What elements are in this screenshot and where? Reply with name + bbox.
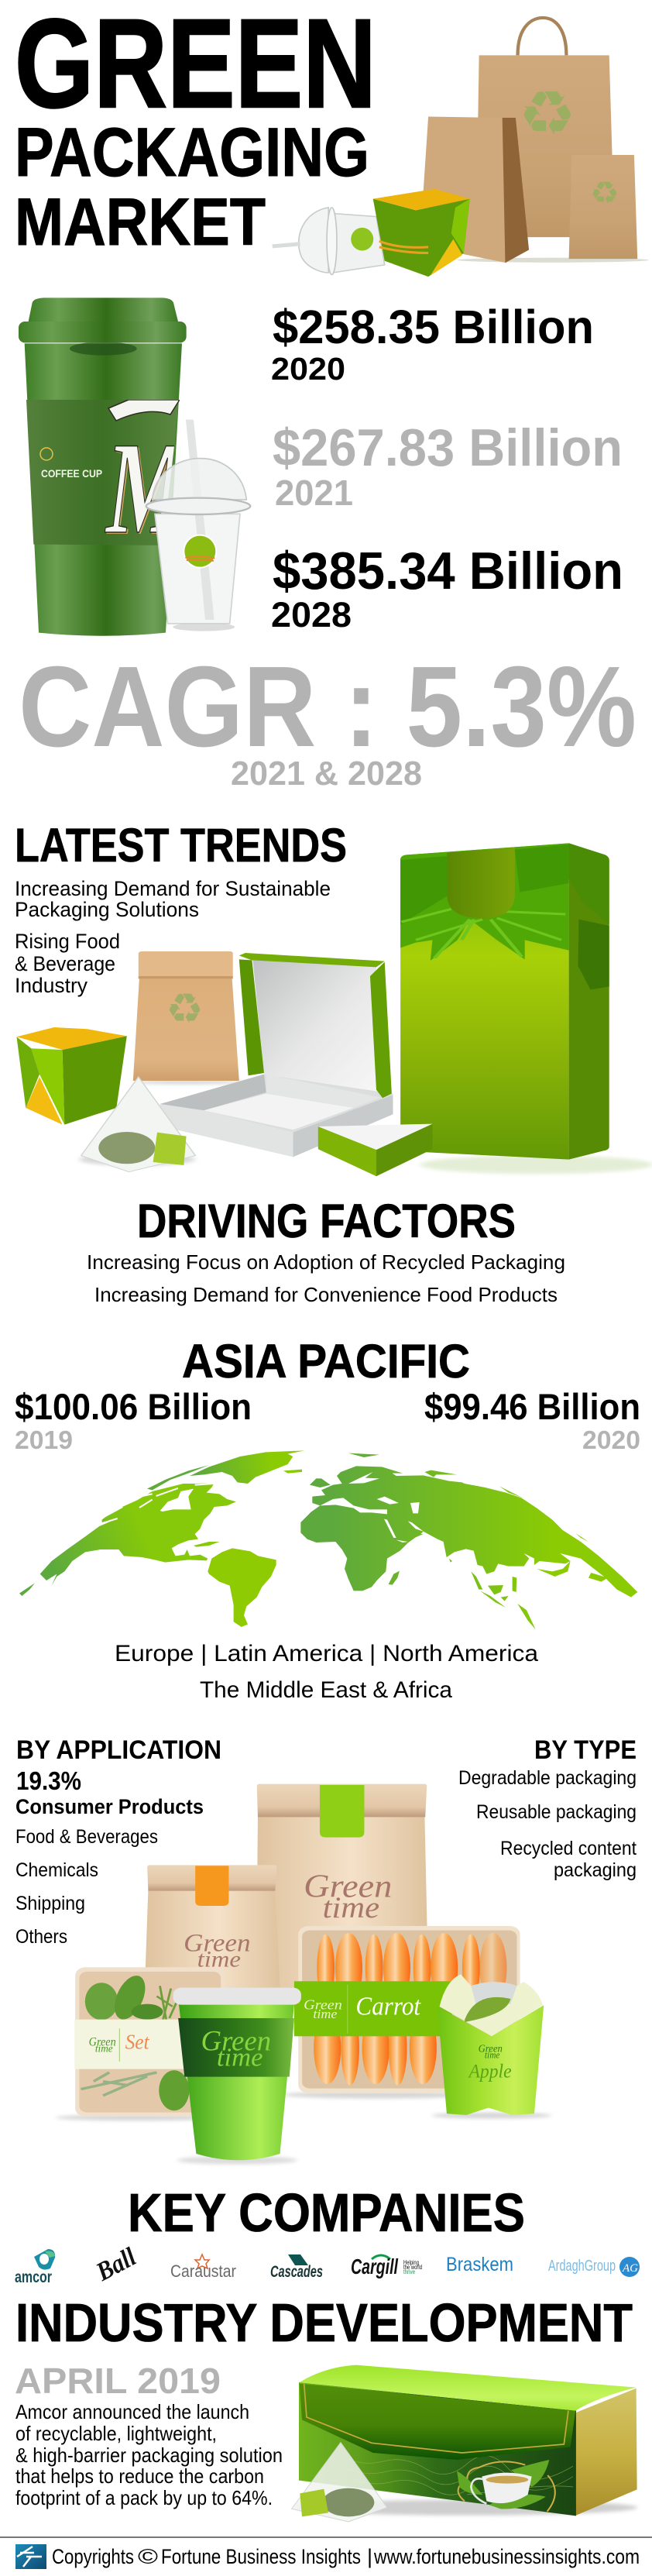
stat: 2020 market size: 2020 xyxy=(271,351,345,387)
text block: type segments: Recycled content xyxy=(500,1838,637,1859)
text block: latest trends: & Beverage xyxy=(15,952,115,975)
text block: other regions: Europe | Latin America | North America xyxy=(115,1641,538,1666)
open pizza box xyxy=(160,953,393,1157)
heading: key companies: KEY COMPANIES xyxy=(128,2182,525,2243)
text block: development: & high-barrier packaging solution xyxy=(15,2444,283,2467)
stat: CAGR: 2021 & 2028 xyxy=(231,755,422,793)
map: americas and greenland xyxy=(19,1450,304,1627)
tall paper bag xyxy=(256,1784,428,1989)
illustration: coffee cup and plastic cup xyxy=(19,297,250,636)
carrot tray: Green xyxy=(304,1997,342,2013)
copyright line xyxy=(52,2545,640,2568)
kraft pouch xyxy=(133,951,241,1085)
text block: application segments: Food & Beverages xyxy=(15,1826,158,1848)
apple fries box xyxy=(431,1974,551,2119)
heading: driving factors: DRIVING FACTORS xyxy=(137,1195,516,1247)
text block: application segments: Consumer Products xyxy=(15,1795,204,1818)
green cup: time xyxy=(217,2044,263,2072)
short paper bag xyxy=(145,1865,280,1989)
logo: cargill: Helping xyxy=(403,2259,419,2266)
illustration: paper bags, cup and box: ♻ xyxy=(518,78,576,150)
slice box xyxy=(318,1124,432,1176)
illustration: tea box and tea bag xyxy=(292,2365,637,2522)
text block: type segments: packaging xyxy=(554,1859,637,1881)
text block: development: footprint of a pack by up to 64%. xyxy=(15,2486,273,2509)
icon: fortune business insights logo xyxy=(15,2544,46,2569)
text block: application segments: Others xyxy=(15,1926,67,1948)
tall paper bag: Green xyxy=(304,1869,392,1904)
tall paper bag: time xyxy=(323,1890,379,1924)
text block: application segments xyxy=(15,1766,204,1948)
illustration: green time packaging xyxy=(56,1784,551,2165)
apple fries box: Apple xyxy=(468,2061,512,2082)
green carton xyxy=(400,843,652,1174)
logo: cascades xyxy=(270,2254,323,2281)
illustration: paper bags, cup and box: ♻ xyxy=(590,175,619,211)
copyright line: | xyxy=(367,2545,372,2568)
title: PACKAGING xyxy=(15,113,369,191)
tea bag xyxy=(79,1077,195,1172)
logo: cargill: the world xyxy=(403,2264,422,2271)
stat: 2021 market size: $267.83 Billion xyxy=(273,418,623,477)
coffee cup label: M xyxy=(106,417,191,562)
herb tray xyxy=(56,1967,225,2120)
logo: cargill: thrive xyxy=(403,2268,415,2275)
logo: cargill: Cargill xyxy=(351,2254,399,2279)
text block: development: Amcor announced the launch xyxy=(15,2400,249,2423)
takeaway box xyxy=(16,1027,127,1125)
apple fries box: Green xyxy=(479,2043,503,2055)
copyright line: Fortune Business Insights xyxy=(161,2545,361,2568)
carrot tray: Carrot xyxy=(355,1993,421,2021)
map: europe, africa and asia xyxy=(300,1453,637,1629)
carrot tray xyxy=(283,1926,520,2099)
heading: latest trends: LATEST TRENDS xyxy=(15,819,347,872)
text block: other regions: The Middle East & Africa xyxy=(200,1677,452,1703)
text block: driving factors xyxy=(87,1250,565,1306)
apple fries box: time xyxy=(485,2050,499,2061)
green cup xyxy=(173,1988,301,2165)
copyright line: Copyrights xyxy=(52,2545,134,2568)
world map xyxy=(19,1450,637,1629)
logo: amcor: amcor xyxy=(15,2268,52,2286)
text block: driving factors: Increasing Demand for Convenience Food Products xyxy=(94,1283,558,1306)
stat: asia pacific 2020: $99.46 Billion xyxy=(424,1386,640,1427)
coffee cup label xyxy=(104,400,180,534)
text block: other regions xyxy=(115,1641,538,1703)
stat: asia pacific 2019: $100.06 Billion xyxy=(15,1386,252,1427)
date: april 2019: APRIL 2019 xyxy=(15,2361,221,2401)
stat: 2028 market size: 2028 xyxy=(271,595,352,635)
logo: braskem: Braskem xyxy=(446,2254,513,2275)
heading: by application: BY APPLICATION xyxy=(16,1735,221,1765)
text block: latest trends xyxy=(15,877,331,997)
text block: type segments: Reusable packaging xyxy=(476,1801,637,1823)
stat: 2028 market size: $385.34 Billion xyxy=(273,542,623,600)
footer xyxy=(15,2544,640,2569)
text block: application segments: Shipping xyxy=(15,1893,85,1914)
green cup: Green xyxy=(201,2025,271,2058)
heading: asia pacific: ASIA PACIFIC xyxy=(182,1335,470,1388)
title: MARKET xyxy=(15,185,266,260)
logo: cascades: Cascades xyxy=(270,2263,323,2281)
text block: type segments xyxy=(458,1767,637,1881)
logo: ball: Ball xyxy=(91,2242,141,2287)
illustration: paper bags, cup and box xyxy=(273,18,649,277)
text block: development: that helps to reduce the carbon xyxy=(15,2464,264,2488)
stat: 2021 market size xyxy=(273,418,623,513)
stat: asia pacific 2020 xyxy=(424,1386,640,1454)
text block: development xyxy=(15,2400,283,2509)
illustration: green packaging set xyxy=(16,843,652,1176)
stat: asia pacific 2020: 2020 xyxy=(582,1426,640,1454)
carrot tray: time xyxy=(313,2007,337,2021)
text block: application segments: Chemicals xyxy=(15,1859,98,1881)
text block: latest trends: Rising Food xyxy=(15,930,120,953)
logos: key companies xyxy=(15,2242,640,2287)
short paper bag: Green xyxy=(184,1928,251,1956)
stat: 2020 market size: $258.35 Billion xyxy=(273,301,594,353)
divider xyxy=(0,2536,652,2538)
text block: latest trends: Industry xyxy=(15,974,88,997)
stat: asia pacific 2019: 2019 xyxy=(15,1426,73,1454)
stat: asia pacific 2019 xyxy=(15,1386,252,1454)
text block: latest trends: Increasing Demand for Sustainable xyxy=(15,877,331,900)
kraft pouch: ♻ xyxy=(166,985,204,1033)
short paper bag: time xyxy=(197,1947,241,1972)
text block: latest trends: Packaging Solutions xyxy=(15,898,199,921)
logo: ardagh group: ArdaghGroup xyxy=(548,2258,616,2275)
text block: application segments: 19.3% xyxy=(16,1766,81,1795)
stat: 2020 market size xyxy=(271,301,594,387)
logo: caraustar: Caraustar xyxy=(170,2261,236,2281)
logo: ardagh group: AG xyxy=(622,2262,638,2275)
herb tray: time xyxy=(95,2044,113,2055)
logo: amcor xyxy=(15,2249,55,2286)
logo: caraustar xyxy=(170,2254,236,2281)
stat: 2021 market size: 2021 xyxy=(275,473,353,513)
herb tray: Green xyxy=(89,2035,116,2048)
herb tray: Set xyxy=(125,2030,150,2054)
text block: development: of recyclable, lightweight, xyxy=(15,2422,217,2445)
heading: by type: BY TYPE xyxy=(534,1735,637,1765)
text block: type segments: Degradable packaging xyxy=(458,1767,637,1789)
copyright line: © xyxy=(138,2545,158,2568)
text block: driving factors: Increasing Focus on Adoption of Recycled Packaging xyxy=(87,1250,565,1274)
title xyxy=(15,0,376,260)
coffee cup xyxy=(19,297,187,636)
illustration: coffee cup and plastic cup: COFFEE CUP xyxy=(41,467,102,480)
plastic cup xyxy=(146,420,250,631)
coffee cup label: M xyxy=(105,415,190,561)
stat: 2028 market size xyxy=(271,542,623,635)
